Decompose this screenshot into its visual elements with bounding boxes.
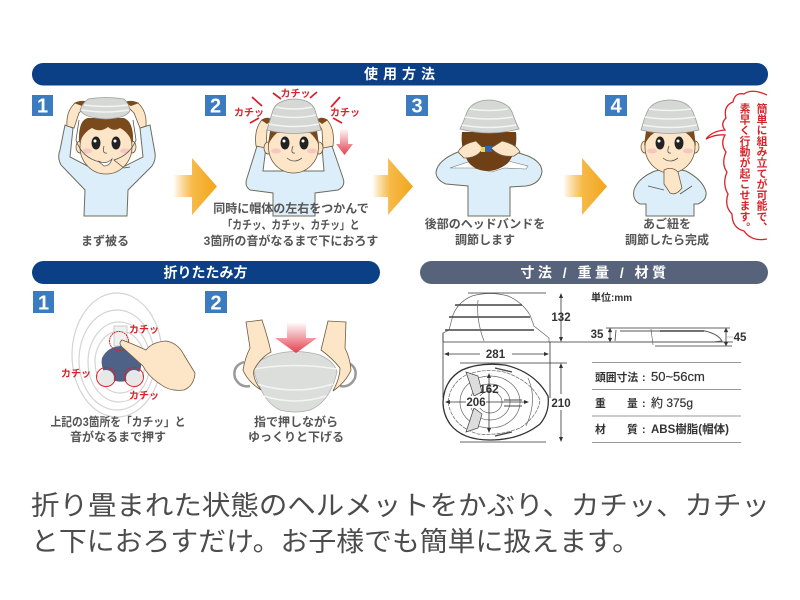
- step number 2: 2: [210, 292, 222, 314]
- character putting on folded helmet: [59, 98, 155, 216]
- head size: [595, 369, 705, 384]
- value: height 132: 132: [551, 312, 571, 324]
- speech bubble callout: 簡単に組み立てが可能で、: [755, 102, 767, 233]
- heading bar: dimensions: 寸法 / 重量 / 材質: [520, 264, 670, 280]
- caption: [204, 200, 378, 248]
- fold step 2: [205, 291, 356, 444]
- weight: 量: [627, 397, 638, 410]
- step 1: put on helmet: [32, 95, 155, 248]
- helmet seen from above with finger: カチッ: [129, 324, 159, 336]
- weight: 重: [595, 396, 606, 410]
- step number 4: [605, 95, 627, 118]
- specification table: [592, 362, 741, 442]
- caption: 調節します: [455, 232, 515, 247]
- click labels: カチッ: [280, 88, 310, 100]
- caption: 上記の3箇所を「カチッ」と: [50, 414, 186, 429]
- speech bubble callout: [706, 91, 767, 240]
- step number 3: [406, 95, 428, 118]
- dimension drawings: [443, 291, 747, 442]
- caption: [625, 216, 709, 247]
- weight: 約 375g: [651, 395, 693, 410]
- step number 3: 3: [411, 96, 423, 118]
- caption: 「カチッ、カチッ、カチッ」と: [222, 218, 360, 232]
- head size: 50~56cm: [651, 369, 705, 384]
- value: 35: 35: [591, 329, 604, 341]
- description text: 折り畳まれた状態のヘルメットをかぶり、カチッ、カチッ: [31, 491, 770, 521]
- character pressing helmet: [246, 99, 344, 216]
- step number 1: [32, 95, 53, 118]
- step number 2: [205, 291, 227, 314]
- step number 2: 2: [210, 96, 221, 118]
- value: width 281: 281: [486, 349, 506, 361]
- helmet seen from above with finger: カチッ: [129, 390, 159, 402]
- step 2: lower until clicks: [204, 88, 378, 248]
- material: 材: [595, 422, 606, 436]
- step number 4: 4: [610, 96, 622, 118]
- folded helmet side view: [606, 328, 733, 346]
- helmet seen from above with finger: カチッ: [61, 368, 91, 380]
- weight: :: [642, 398, 646, 410]
- caption: 3箇所の音がなるまで下におろす: [204, 233, 378, 248]
- step 4: adjust chin strap: [605, 95, 709, 247]
- fold step 1: [33, 291, 195, 444]
- arrow: [173, 158, 217, 215]
- step number 1: 1: [38, 292, 49, 314]
- caption: [425, 216, 545, 247]
- description text: と下におろすだけ。お子様でも簡単に扱えます。: [31, 527, 640, 557]
- step number 1: [33, 291, 54, 314]
- heading bar: folding: [32, 261, 380, 284]
- material: :: [642, 424, 646, 436]
- click labels: [234, 88, 360, 123]
- value: 162: 162: [479, 384, 499, 396]
- weight: [595, 395, 693, 410]
- helmet side view: [443, 294, 549, 342]
- helmet top view: [443, 364, 548, 440]
- arrow: [563, 158, 607, 215]
- value: 45: 45: [734, 332, 747, 344]
- caption: 調節したら完成: [625, 232, 709, 247]
- down arrow: [336, 128, 353, 155]
- unit label: 単位:mm: [591, 291, 632, 304]
- material: 質: [627, 422, 638, 436]
- speech bubble callout: 素早く行動が起こせます。: [738, 102, 750, 233]
- material: [595, 422, 729, 436]
- material: ABS樹脂(帽体): [651, 422, 729, 436]
- hands pressing helmet down: [234, 320, 356, 412]
- dimension lines: [443, 293, 733, 442]
- arrow: [372, 158, 413, 215]
- caption: 同時に帽体の左右をつかんで: [213, 200, 369, 216]
- step number 2: [205, 95, 226, 118]
- caption: [50, 414, 186, 444]
- character tying chin strap: [634, 100, 706, 216]
- caption: 音がなるまで押す: [70, 429, 166, 444]
- character from behind: [436, 100, 542, 216]
- helmet seen from above with finger: [61, 293, 195, 417]
- caption: まず被る: [81, 233, 129, 248]
- caption: あご紐を: [643, 216, 691, 231]
- heading bar: usage: [32, 63, 768, 86]
- caption: 後部のヘッドバンドを: [425, 216, 545, 231]
- click labels: カチッ: [330, 107, 360, 119]
- step 3: adjust headband: [406, 95, 545, 247]
- step number 1: 1: [37, 96, 48, 118]
- click labels: カチッ: [234, 107, 264, 119]
- caption: [248, 414, 344, 444]
- caption: ゆっくりと下げる: [248, 430, 344, 444]
- head size: :: [642, 372, 646, 384]
- caption: 指で押しながら: [254, 414, 338, 429]
- value: length 210: 210: [551, 398, 571, 410]
- heading bar: folding: 折りたたみ方: [164, 264, 248, 280]
- head size: 頭囲寸法: [595, 370, 638, 384]
- heading bar: usage: 使用方法: [364, 66, 440, 82]
- description text: [31, 491, 770, 557]
- heading bar: dimensions: [420, 261, 768, 284]
- value: 206: 206: [466, 397, 486, 409]
